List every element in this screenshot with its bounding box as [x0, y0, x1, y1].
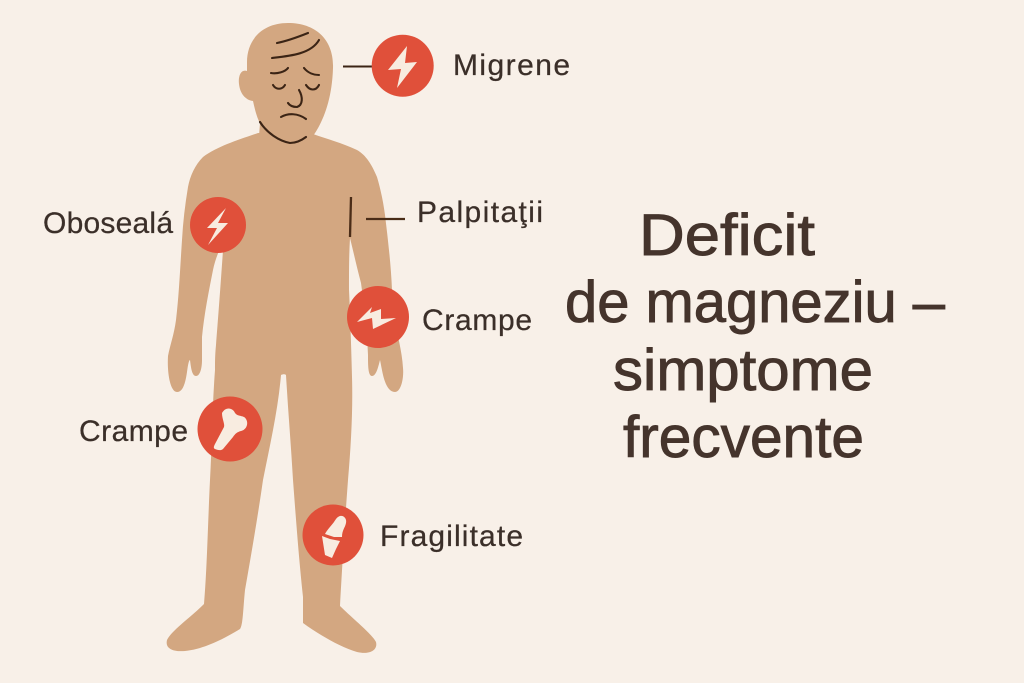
- title: frecvente: [623, 405, 864, 470]
- label: Crampe arm: Crampe: [422, 304, 532, 337]
- label: Migrene: Migrene: [453, 49, 570, 82]
- forehead wrinkles: [260, 33, 319, 143]
- connector: migraine: [343, 66, 373, 68]
- body silhouette: [167, 133, 403, 653]
- title: [565, 203, 946, 470]
- label: Palpitații: Palpitaţii: [417, 196, 543, 229]
- label: Crampe leg: Crampe: [79, 415, 188, 448]
- label: Fragilitate: Fragilitate: [380, 520, 523, 553]
- badge: fatigue: [190, 197, 246, 253]
- eyebrows and closed eyes: [271, 68, 288, 73]
- connector: palpitations: [366, 218, 405, 220]
- title: simptome: [613, 338, 873, 403]
- title: Deficit: [639, 203, 815, 268]
- chest line: [350, 197, 351, 237]
- human figure: [167, 23, 403, 653]
- jaw line: [260, 122, 306, 143]
- badge: fragility joint: [302, 504, 364, 566]
- label: Obosealá: Obosealá: [43, 207, 173, 240]
- badge: migraine: [372, 35, 434, 97]
- title: de magneziu –: [565, 270, 946, 335]
- head and ear: [239, 23, 333, 136]
- badge: leg cramps bone: [198, 396, 262, 462]
- badge: arm cramps: [347, 286, 409, 348]
- mouth: [281, 114, 306, 119]
- nose: [288, 90, 302, 107]
